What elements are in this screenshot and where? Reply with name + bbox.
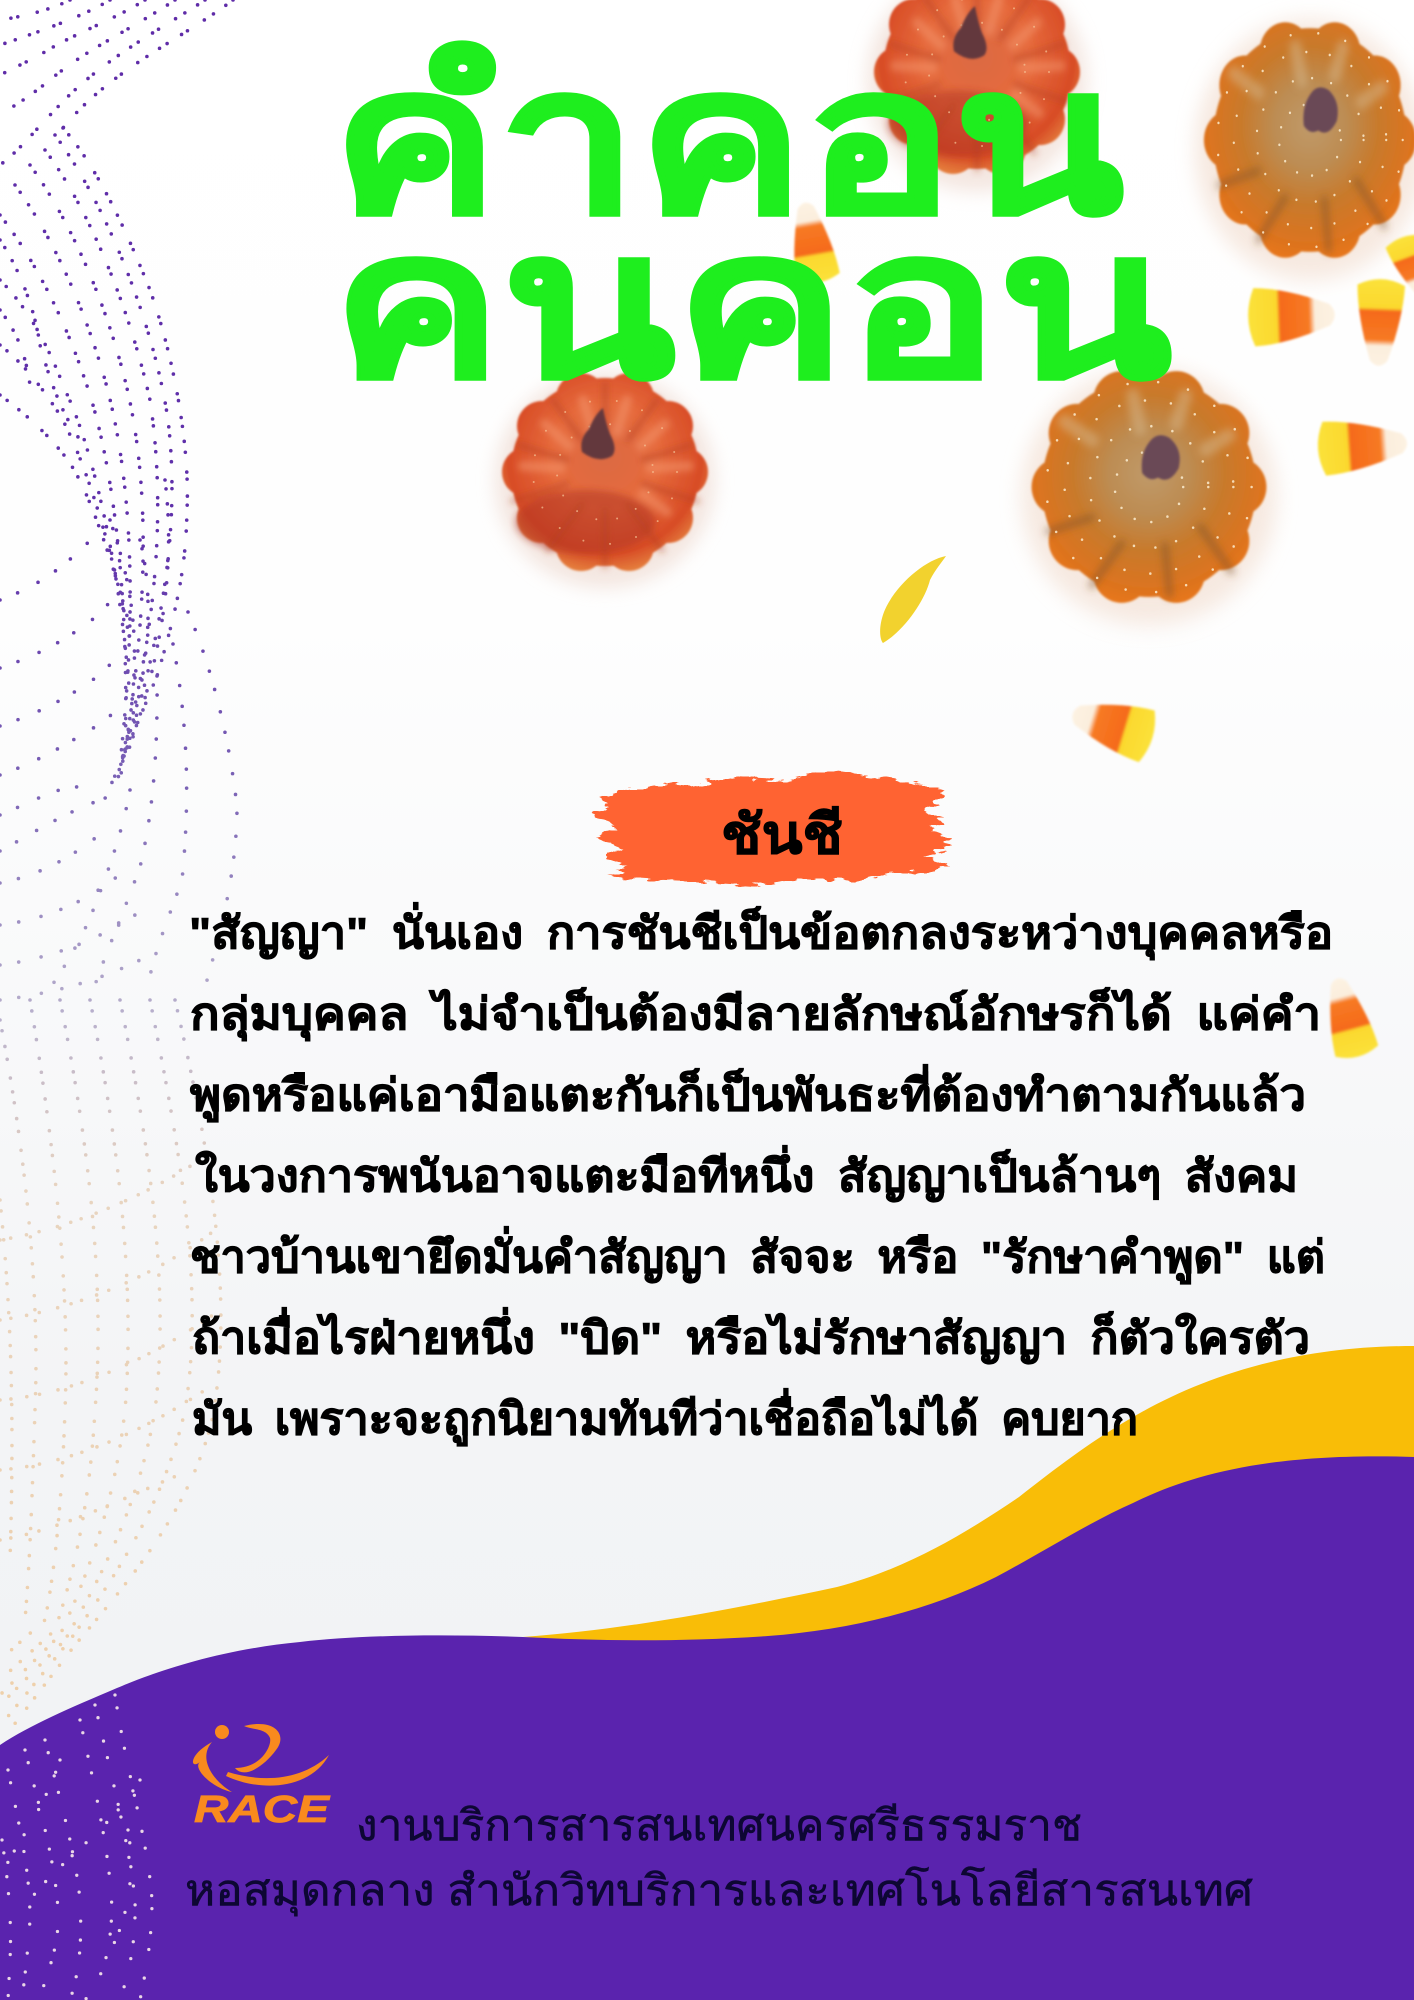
title line 2: คนคอน	[332, 191, 1172, 420]
pumpkin: right	[1021, 368, 1277, 625]
body line 4: ในวงการพนันอาจแตะมือทีหนึ่ง สัญญาเป็นล้านๆ สังคม	[195, 1145, 1298, 1202]
footer text	[185, 1802, 1253, 1917]
yellow wave	[523, 1346, 1414, 1660]
logo swoosh	[193, 1724, 329, 1792]
candy corn pieces	[783, 199, 1414, 1062]
body line 5: ชาวบ้านเขายึดมั่นคำสัญญา สัจจะ หรือ "รักษาคำพูด" แต่	[190, 1226, 1325, 1284]
pumpkin: top center	[867, 0, 1087, 191]
dotted wave pattern	[0, 0, 237, 1730]
body line 3: พูดหรือแค่เอามือแตะกันก็เป็นพันธะที่ต้องทำตามกันแล้ว	[190, 1064, 1306, 1122]
decorative pumpkins	[495, 0, 1414, 643]
pumpkin: top right	[1195, 19, 1414, 280]
logo wordmark: RACE	[194, 1789, 331, 1831]
footer line 1: งานบริการสารสนเทศนครศรีธรรมราช	[356, 1802, 1082, 1850]
pumpkin: left	[495, 372, 715, 588]
body line 1: "สัญญา" นั่นเอง การชันชีเป็นข้อตกลงระหว่างบุคคลหรือ	[189, 902, 1333, 961]
title	[332, 27, 1172, 420]
logo: RACE	[193, 1724, 331, 1831]
body paragraph	[189, 902, 1333, 1446]
footer line 2: หอสมุดกลาง สำนักวิทบริการและเทศโนโลยีสารสนเทศ	[185, 1866, 1253, 1917]
purple footer wave	[0, 1456, 1414, 2000]
title line 1: คำคอน	[332, 27, 1124, 256]
pale dots on footer	[0, 1695, 152, 2000]
heading with orange brush	[592, 771, 952, 886]
body line 6: ถ้าเมื่อไรฝ่ายหนึ่ง "บิด" หรือไม่รักษาสัญญา ก็ตัวใครตัว	[192, 1307, 1310, 1364]
body line 2: กลุ่มบุคคล ไม่จำเป็นต้องมีลายลักษณ์อักษรก็ได้ แค่คำ	[190, 987, 1321, 1042]
brush stroke	[592, 771, 952, 886]
body line 7: มัน เพราะจะถูกนิยามทันทีว่าเชื่อถือไม่ได้ คบยาก	[192, 1388, 1138, 1446]
leaf	[880, 556, 946, 643]
heading text: ชันชี	[721, 805, 843, 865]
